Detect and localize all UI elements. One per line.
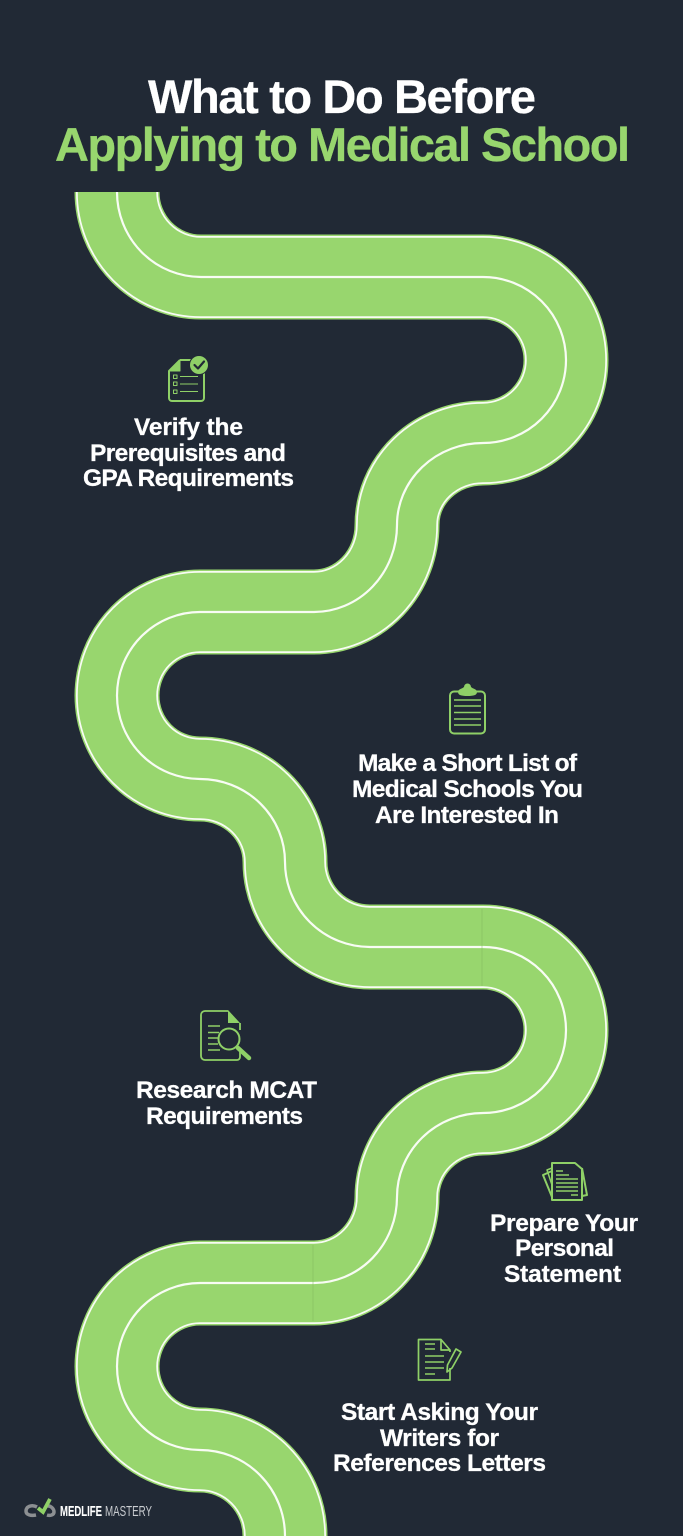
label: personal statement: Statement [504, 1261, 621, 1288]
label: verify prerequisites [83, 414, 294, 492]
label: research MCAT: Research MCAT [136, 1077, 317, 1104]
title: What to Do Before [148, 70, 536, 123]
label: short list of schools: Make a Short List of [358, 750, 578, 777]
label: research MCAT [136, 1077, 317, 1130]
label: references letters [333, 1399, 546, 1477]
label: references letters: Writers for [380, 1425, 499, 1452]
title [55, 70, 630, 171]
step: personal statement [490, 1163, 638, 1288]
wordmark: MEDLIFE [60, 1503, 102, 1520]
label: short list of schools: Are Interested In [375, 802, 559, 829]
icon: document with pen [418, 1340, 461, 1380]
icon: logo mark [26, 1499, 54, 1515]
label: verify prerequisites: Verify the [134, 414, 243, 441]
step: research MCAT [136, 1010, 317, 1130]
step: short list of schools [352, 684, 583, 829]
step: references letters [333, 1340, 546, 1477]
label: references letters: Start Asking Your [341, 1399, 538, 1426]
label: references letters: References Letters [333, 1450, 546, 1477]
winding green road [117, 180, 566, 1536]
label: personal statement: Prepare Your [490, 1210, 638, 1237]
title: Applying to Medical School [55, 118, 630, 171]
icon: checklist document [169, 355, 209, 401]
logo: medlife mastery [26, 1499, 152, 1520]
wordmark: MASTERY [105, 1503, 152, 1520]
label: research MCAT: Requirements [146, 1103, 303, 1130]
label: short list of schools [352, 750, 583, 829]
label: personal statement [490, 1210, 638, 1288]
icon: document with magnifier [201, 1010, 249, 1060]
label: short list of schools: Medical Schools You [352, 776, 583, 803]
icon: stacked papers [543, 1163, 587, 1200]
label: verify prerequisites: GPA Requirements [83, 465, 294, 492]
icon: clipboard [450, 684, 485, 734]
step: verify prerequisites [83, 355, 294, 492]
label: personal statement: Personal [515, 1235, 614, 1262]
label: verify prerequisites: Prerequisites and [90, 440, 286, 467]
